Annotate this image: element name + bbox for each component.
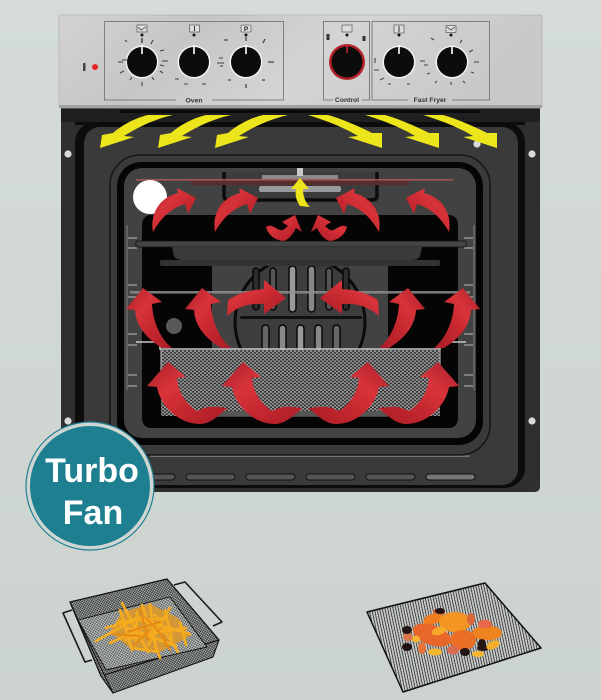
wire rack <box>130 291 470 294</box>
badge: Turbo Fan: Fan <box>63 494 123 532</box>
section frames <box>104 22 490 100</box>
red airflow arrows: bottom row <box>147 362 459 424</box>
knob 3 <box>224 25 274 88</box>
door opening <box>110 155 490 455</box>
badge: Turbo Fan: Turbo <box>45 452 139 490</box>
knob 5 <box>374 25 428 84</box>
label: Control: Control <box>335 97 359 104</box>
door mounting screws <box>64 140 536 425</box>
french fries <box>96 603 190 658</box>
badge: Turbo Fan <box>26 422 154 550</box>
control panel <box>59 15 542 108</box>
knob 3: P <box>244 26 249 33</box>
knob 2 <box>175 25 224 84</box>
knob 4: control, red ring <box>328 25 365 80</box>
red airflow arrows: top row <box>152 188 450 241</box>
fry basket <box>63 579 222 693</box>
red airflow arrows: middle row <box>126 280 480 348</box>
side rails <box>127 225 474 390</box>
roof frame and grill <box>136 168 453 200</box>
yellow arrows: top air intake <box>100 115 497 148</box>
dried fruit <box>402 608 502 657</box>
basket handles <box>63 582 222 662</box>
oven light <box>166 318 182 334</box>
indicator light <box>83 63 98 71</box>
cavity back <box>142 215 458 428</box>
heat flow: white glare <box>133 180 167 214</box>
upper tray <box>136 241 466 266</box>
oven body <box>61 100 540 492</box>
fan cover <box>235 257 365 387</box>
knob 1 <box>118 25 168 86</box>
mesh basket <box>136 342 466 416</box>
knob 6 <box>427 26 479 85</box>
bottom vent strip <box>148 456 475 480</box>
basket mesh <box>70 579 219 693</box>
drying mat <box>367 583 541 692</box>
yellow arrow: centre <box>291 178 310 207</box>
label: Oven: Oven <box>186 98 202 104</box>
label: Fast Fryer: Fast Fryer <box>414 97 447 104</box>
